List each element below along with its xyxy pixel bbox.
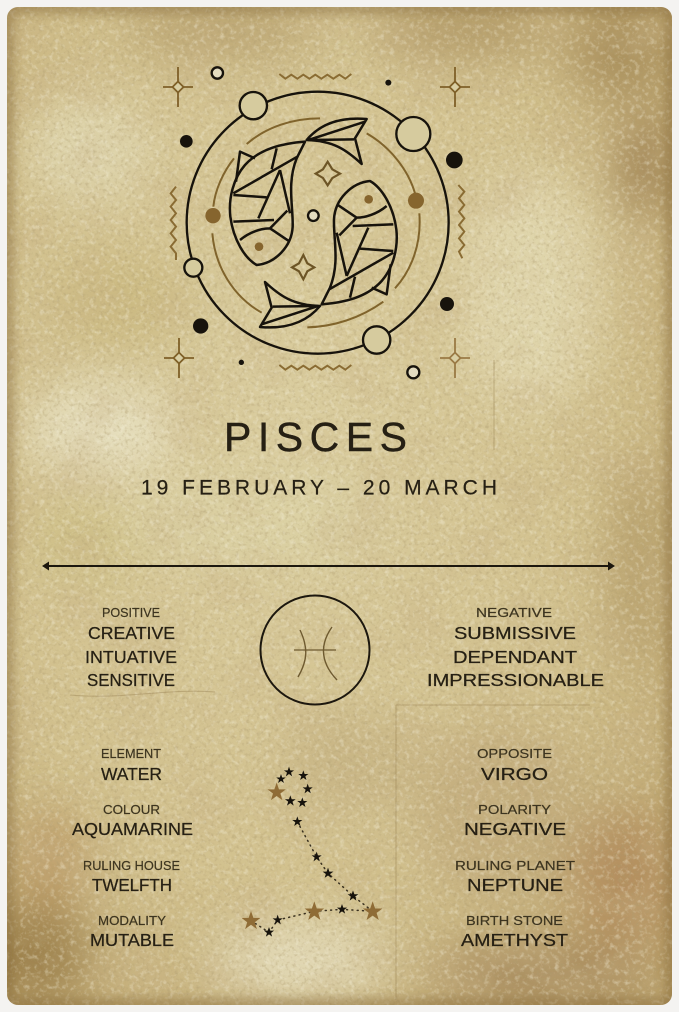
Pisces constellation	[241, 767, 382, 937]
upper fish	[230, 119, 367, 265]
lower fish	[260, 181, 397, 327]
negative traits: NEGATIVE	[476, 606, 552, 620]
dotted connectors	[251, 822, 373, 932]
ruling house	[83, 859, 180, 895]
Pisces symbol circle	[260, 596, 370, 704]
polarity: NEGATIVE	[464, 819, 566, 839]
ruling planet: NEPTUNE	[467, 875, 563, 895]
negative traits: DEPENDANT	[453, 647, 577, 667]
sparkle top right	[440, 67, 470, 107]
birth stone: AMETHYST	[461, 930, 568, 950]
colour	[72, 803, 193, 839]
inner brown arcs	[212, 118, 420, 327]
negative traits	[427, 606, 604, 690]
opposite	[477, 747, 552, 784]
central sparkles	[292, 162, 340, 279]
sparkle bottom right	[440, 338, 470, 378]
positive traits	[85, 606, 177, 690]
modality	[90, 914, 174, 950]
colour: AQUAMARINE	[72, 819, 193, 839]
birth stone: BIRTH STONE	[466, 914, 563, 928]
dates: 19 FEBRUARY – 20 MARCH	[141, 476, 497, 500]
wavy lines	[171, 74, 464, 370]
brown dots	[205, 193, 424, 251]
birth stone	[461, 914, 568, 950]
positive traits: CREATIVE	[88, 623, 175, 643]
double-headed arrow divider	[42, 562, 615, 570]
sparkle bottom left	[164, 338, 194, 378]
corner sparkles	[163, 67, 193, 107]
modality: MUTABLE	[90, 930, 174, 950]
element: WATER	[101, 764, 162, 784]
ruling house: TWELFTH	[92, 875, 172, 895]
ruling house: RULING HOUSE	[83, 859, 180, 873]
ruling planet	[455, 859, 575, 895]
negative traits: IMPRESSIONABLE	[427, 670, 604, 690]
element: ELEMENT	[101, 747, 161, 761]
brown stars	[241, 783, 382, 929]
title: PISCES	[224, 414, 407, 460]
colour: COLOUR	[103, 803, 160, 817]
opposite: VIRGO	[481, 764, 548, 784]
polarity	[464, 803, 566, 839]
opposite: OPPOSITE	[477, 747, 552, 761]
zodiac emblem: Pisces fish in orbit	[171, 67, 464, 378]
ruling planet: RULING PLANET	[455, 859, 575, 873]
negative traits: SUBMISSIVE	[454, 623, 576, 643]
orbit ring	[187, 92, 449, 354]
orbit planets	[184, 67, 430, 378]
positive traits: POSITIVE	[102, 606, 160, 620]
positive traits: SENSITIVE	[87, 670, 175, 690]
positive traits: INTUATIVE	[85, 647, 177, 667]
polarity: POLARITY	[478, 803, 552, 817]
black dots	[180, 80, 463, 365]
modality: MODALITY	[98, 914, 167, 928]
element	[101, 747, 162, 784]
black stars	[264, 767, 358, 937]
